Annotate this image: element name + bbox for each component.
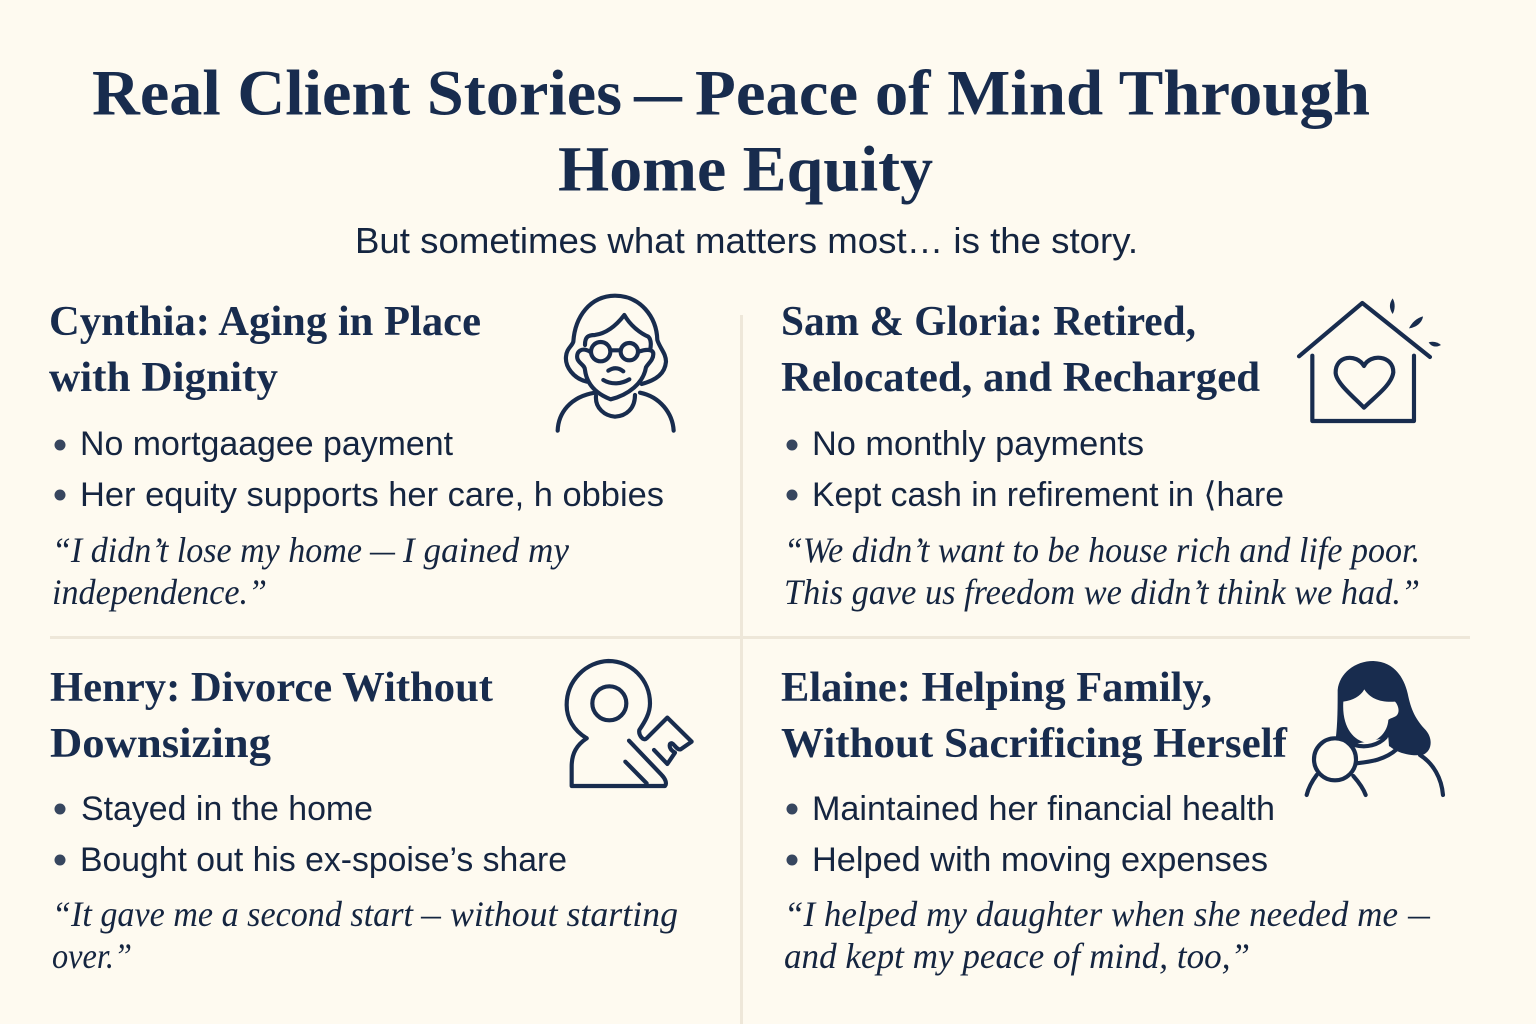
heading: Elaine xyxy=(781,665,1288,767)
icon: house with heart xyxy=(1299,298,1441,421)
quote: Henry: “It gave me a second start xyxy=(52,894,414,934)
icon: key xyxy=(567,661,692,786)
quote: Cynthia: independence.” xyxy=(52,572,267,612)
quote: Henry: over.” xyxy=(52,936,132,976)
quote: Elaine xyxy=(784,894,1431,976)
bullet list: Elaine: Maintained her financial health xyxy=(812,790,1275,828)
bullet list: Elaine: Helped with moving expenses xyxy=(812,841,1268,879)
bullet list: Henry: Bought out his ex-spoise’s share xyxy=(80,841,567,879)
bullet list: Sam and Gloria xyxy=(786,425,1284,514)
bullet list: Cynthia: No mortgaagee payment xyxy=(80,425,454,463)
quote: Cynthia: I gained my xyxy=(402,530,569,570)
bullet list: Henry: Stayed in the home xyxy=(81,790,373,828)
heading: Elaine: Without Sacrificing Herself xyxy=(781,721,1288,767)
quote: Henry xyxy=(52,894,678,976)
panel: Elaine xyxy=(781,661,1443,976)
title: — xyxy=(633,58,683,130)
heading: Sam and Gloria: Sam & Gloria: Retired, xyxy=(781,299,1196,345)
heading: Elaine: Elaine: Helping Family, xyxy=(781,665,1212,711)
bullet list: Sam and Gloria: No monthly payments xyxy=(812,425,1144,463)
quote: Henry: without starting xyxy=(450,894,678,934)
bullet list: Cynthia: Her equity supports her care, h obbies xyxy=(80,476,664,514)
title: Home Equity xyxy=(558,134,933,206)
quote: Henry: — xyxy=(420,894,442,934)
quote: Sam and Gloria xyxy=(784,530,1420,612)
subtitle: But sometimes what matters most… is the story. xyxy=(355,220,1138,261)
title: Peace of Mind Through xyxy=(695,58,1370,130)
title: Real Client Stories xyxy=(92,58,622,130)
quote: Elaine: and kept my peace of mind, too,” xyxy=(784,936,1250,976)
bullet list: Sam and Gloria: Kept cash in refirement in ⟨hare xyxy=(812,476,1284,514)
quote: Elaine: “I helped my daughter when she needed me xyxy=(784,894,1398,934)
icon: mother and child xyxy=(1307,661,1443,795)
panel: Sam and Gloria xyxy=(781,298,1441,612)
title xyxy=(92,58,1370,206)
quote: Sam and Gloria: “We didn’t want to be house rich and life poor. xyxy=(784,530,1420,570)
panel: Henry xyxy=(50,661,692,976)
icon: older woman with glasses xyxy=(558,296,674,431)
heading: Cynthia xyxy=(49,299,481,401)
bullet list: Henry xyxy=(54,790,567,879)
bullet list: Elaine xyxy=(786,790,1275,879)
heading: Henry: Downsizing xyxy=(50,721,271,767)
quote: Elaine: — xyxy=(1407,894,1431,934)
quote: Cynthia xyxy=(52,530,569,612)
quote: Cynthia: — xyxy=(369,530,396,570)
bullet list: Cynthia xyxy=(54,425,664,514)
quote: Cynthia: “I didn’t lose my home xyxy=(52,530,362,570)
heading: Henry xyxy=(50,665,493,767)
quote: Sam and Gloria: This gave us freedom we didn’t think we had.” xyxy=(784,572,1420,612)
heading: Cynthia: Cynthia: Aging in Place xyxy=(49,299,481,345)
heading: Sam and Gloria xyxy=(781,299,1260,401)
heading: Henry: Henry: Divorce Without xyxy=(50,665,493,711)
panel: Cynthia xyxy=(49,296,674,612)
heading: Cynthia: with Dignity xyxy=(49,355,278,401)
heading: Sam and Gloria: Relocated, and Recharged xyxy=(781,355,1260,401)
